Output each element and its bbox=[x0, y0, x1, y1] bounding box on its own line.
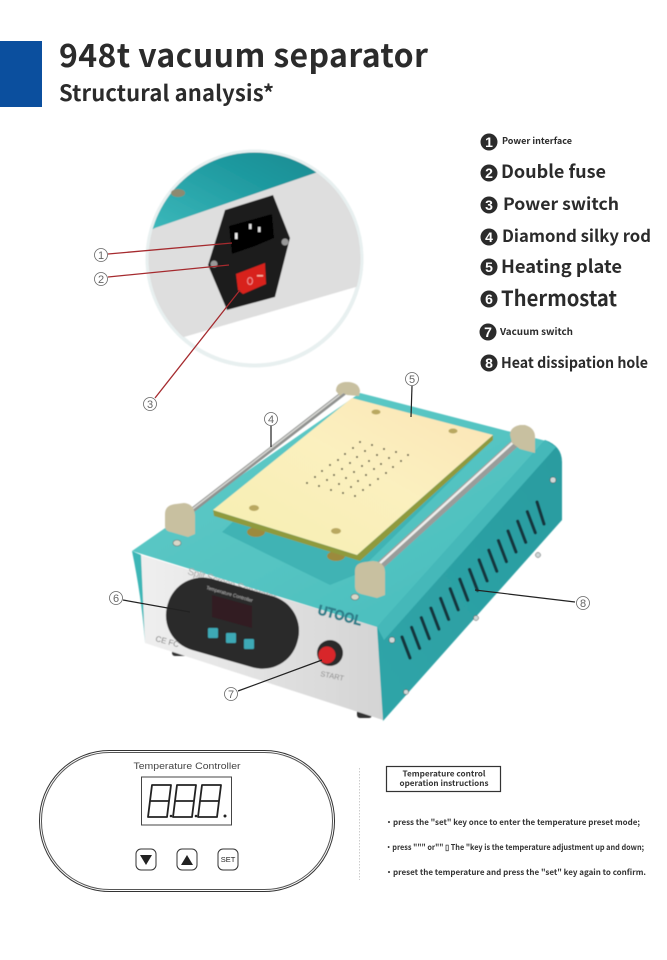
legend list bbox=[480, 134, 651, 373]
right rod bbox=[375, 436, 522, 570]
panel buttons bbox=[208, 628, 254, 649]
instructions heading box: operation instructions bbox=[400, 778, 489, 789]
instructions heading box: Temperature control bbox=[402, 768, 486, 780]
teal cover bbox=[152, 152, 317, 230]
legend item 8: 8 bbox=[485, 355, 493, 371]
up button bbox=[177, 849, 197, 870]
certification marks: CE FC bbox=[154, 634, 180, 649]
digital display bbox=[142, 777, 232, 825]
screen bbox=[212, 595, 252, 628]
top face bbox=[132, 393, 550, 627]
callout markers 4-8: 4 bbox=[268, 414, 274, 426]
faint product name: Split Screen Separator bbox=[186, 566, 278, 604]
plate shadow bbox=[222, 410, 480, 585]
down button bbox=[136, 849, 156, 870]
callout markers 4-8 bbox=[110, 372, 590, 701]
legend item 2: 2 bbox=[485, 165, 493, 181]
legend item 4: 4 bbox=[485, 229, 493, 245]
panel caption: Temperature Controller bbox=[205, 585, 254, 604]
legend item 3: Power switch bbox=[503, 190, 619, 215]
legend item 8: Heat dissipation hole bbox=[501, 352, 648, 373]
brand mark: UTOOL bbox=[316, 601, 364, 629]
screw bbox=[171, 189, 185, 197]
callout markers 1-3 bbox=[94, 248, 156, 411]
heating plate bbox=[213, 398, 493, 555]
plug recess bbox=[229, 214, 274, 254]
plate screws bbox=[249, 410, 458, 534]
machine illustration bbox=[132, 382, 562, 721]
callout lines: black bbox=[123, 386, 575, 691]
callout markers 4-8: 8 bbox=[580, 598, 586, 610]
instruction line 1: ·press the "set" key once to enter the temperature preset mode; bbox=[385, 817, 640, 828]
instruction line 2: ·press """ or"" ▯ The "key is the temperature adjustment up and down; bbox=[385, 842, 644, 853]
heating plate edge bbox=[213, 435, 493, 561]
temperature controller diagram bbox=[40, 750, 334, 892]
side screws bbox=[389, 477, 556, 694]
callout markers 1-3: 3 bbox=[147, 399, 153, 411]
legend item 3: 3 bbox=[485, 197, 493, 213]
callout markers 1-3: 1 bbox=[98, 250, 104, 262]
instructions heading box bbox=[386, 766, 500, 792]
callout markers 4-8: 5 bbox=[409, 374, 415, 386]
red rocker switch bbox=[236, 263, 266, 294]
ventilation slits bbox=[402, 502, 544, 658]
instruction line 3: ·preset the temperature and press the "set" key again to confirm. bbox=[385, 867, 646, 878]
legend item 6: 6 bbox=[485, 291, 493, 307]
start button bbox=[317, 640, 343, 666]
legend item 5: Heating plate bbox=[501, 253, 622, 279]
front face bbox=[141, 555, 383, 720]
legend item 2: Double fuse bbox=[501, 158, 606, 184]
legend item 5: 5 bbox=[485, 259, 493, 275]
mounting screws bbox=[282, 238, 288, 246]
legend item 1: 1 bbox=[485, 134, 493, 150]
callout markers 4-8: 7 bbox=[228, 689, 234, 701]
callout markers 1-3: 2 bbox=[98, 274, 104, 286]
inset: rear power socket detail bbox=[146, 150, 364, 368]
side face bbox=[377, 440, 562, 721]
start label: START bbox=[320, 669, 345, 683]
vacuum holes bbox=[306, 441, 409, 497]
legend item 6: Thermostat bbox=[501, 283, 617, 313]
legend item 4: Diamond silky rod bbox=[502, 223, 651, 247]
plate standoffs bbox=[247, 527, 265, 537]
teal left lip bbox=[132, 551, 145, 643]
set button: SET bbox=[221, 855, 236, 864]
socket housing bbox=[208, 195, 290, 310]
legend item 1: Power interface bbox=[502, 134, 572, 147]
set button bbox=[218, 849, 238, 870]
feet bbox=[172, 648, 188, 656]
callout lines: red bbox=[108, 243, 240, 398]
legend item 7: 7 bbox=[484, 324, 492, 340]
left rod bbox=[190, 391, 345, 512]
subtitle: Structural analysis* bbox=[59, 76, 274, 108]
header accent block bbox=[0, 41, 42, 107]
base screws bbox=[173, 540, 359, 600]
display panel bbox=[157, 569, 308, 677]
legend item 7: Vacuum switch bbox=[499, 324, 573, 338]
title: 948t vacuum separator bbox=[59, 31, 428, 77]
controller label: Temperature Controller bbox=[134, 761, 240, 772]
dotted divider bbox=[358, 768, 360, 880]
rear panel bbox=[148, 172, 360, 337]
rod caps bbox=[165, 382, 535, 598]
callout markers 4-8: 6 bbox=[113, 593, 119, 605]
legend item 1 bbox=[480, 134, 572, 150]
legend item 7 bbox=[480, 324, 573, 340]
